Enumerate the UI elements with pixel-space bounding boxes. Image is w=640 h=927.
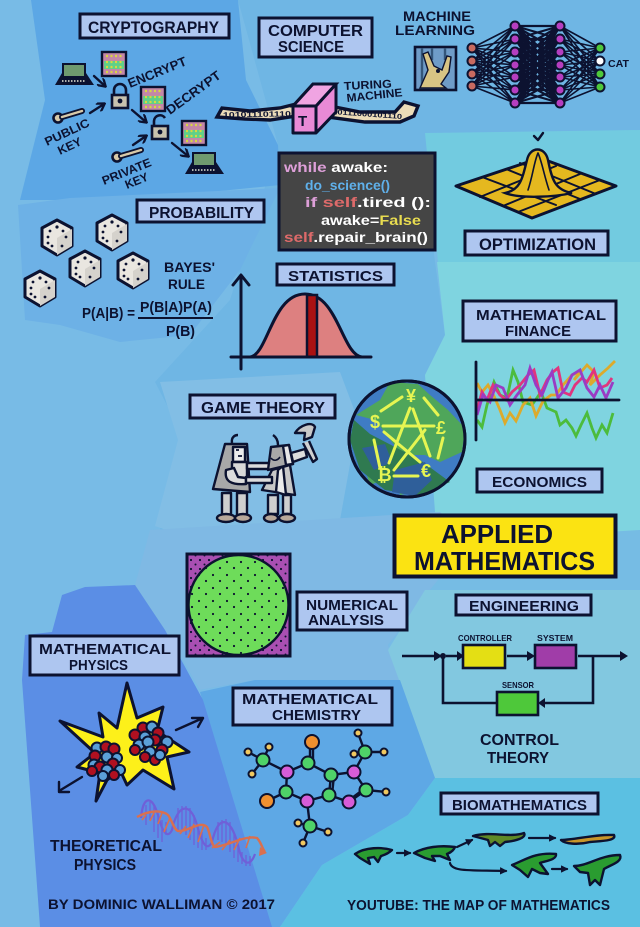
currency symbols: €	[421, 461, 431, 481]
heading: machine learning	[395, 9, 475, 38]
cryptography diagram	[42, 52, 224, 192]
input nodes	[468, 44, 476, 90]
arrow: up right	[176, 718, 203, 730]
dice	[25, 215, 148, 306]
system	[535, 633, 576, 668]
currency symbols	[370, 386, 446, 485]
heading: economics	[477, 469, 602, 492]
icon: die one	[42, 220, 72, 255]
labels: encrypt decrypt keys: PRIVATE	[100, 155, 153, 188]
heading: game theory	[190, 395, 335, 418]
green atoms	[256, 746, 372, 832]
controller	[458, 633, 512, 668]
tape left	[217, 104, 296, 120]
gold series	[477, 361, 615, 423]
controller: CONTROLLER	[458, 633, 512, 643]
heading: optimization	[465, 231, 608, 255]
heading: mathematical chemistry: MATHEMATICAL	[242, 692, 378, 708]
creature two	[414, 846, 455, 861]
hidden layer one	[510, 22, 520, 108]
heading: statistics: STATISTICS	[288, 268, 383, 285]
label: turing machine: TURING	[344, 78, 392, 93]
sensor	[497, 680, 538, 715]
neural network	[468, 22, 629, 108]
title: applied mathematics: APPLIED	[441, 519, 553, 549]
sensor: SENSOR	[502, 680, 534, 690]
tape right with curl: 10111000101110	[332, 109, 402, 121]
turing machine head: T	[298, 113, 307, 130]
code panel: self .repair_brain()	[284, 229, 428, 245]
bayes rule text: P(B|A)P(A)	[140, 299, 212, 316]
molecule	[244, 730, 390, 846]
bayes rule text	[82, 260, 215, 340]
currency symbols: ¥	[406, 386, 416, 406]
heading: economics: ECONOMICS	[492, 474, 587, 491]
purple series	[477, 368, 613, 415]
icon: die five	[118, 253, 148, 288]
star burst	[60, 683, 189, 801]
arrows: flow of encryption	[90, 76, 188, 156]
monte carlo square	[187, 554, 290, 656]
currency symbols: £	[436, 418, 446, 438]
icon: encrypted message	[141, 87, 165, 111]
heading: machine learning: LEARNING	[395, 23, 475, 38]
hidden layer two	[556, 22, 564, 108]
turing machine head	[293, 84, 336, 133]
title: applied mathematics	[394, 516, 616, 576]
highlighted band	[307, 295, 317, 357]
heading: mathematical physics: PHYSICS	[69, 658, 128, 674]
label: theoretical physics	[50, 838, 162, 874]
axes	[476, 362, 619, 440]
heading: probability: PROBABILITY	[149, 205, 255, 222]
bayes rule text: P(B)	[166, 323, 195, 340]
heading: engineering	[456, 595, 591, 615]
icon: die four	[70, 251, 100, 286]
heading: computer science: COMPUTER	[268, 23, 363, 40]
system: SYSTEM	[537, 633, 573, 643]
heading: computer science	[259, 18, 372, 57]
heading: biomathematics: BIOMATHEMATICS	[452, 797, 587, 814]
output nodes	[596, 44, 604, 92]
heading: biomathematics	[441, 793, 598, 814]
labels: encrypt decrypt keys	[42, 54, 224, 192]
heading: numerical analysis: ANALYSIS	[308, 613, 384, 629]
labels: encrypt decrypt keys: ENCRYPT	[126, 54, 189, 91]
heading: probability	[137, 200, 264, 222]
icon: decrypted message	[182, 121, 206, 145]
green series	[477, 370, 613, 438]
robot left	[213, 435, 270, 522]
creature six	[574, 855, 620, 885]
grid lines	[480, 163, 600, 212]
icon: die three	[25, 271, 55, 306]
currency symbols: ₿	[377, 465, 392, 485]
code panel: if self .tired ():	[305, 194, 431, 210]
icon: closed lock	[112, 84, 128, 108]
creature five	[512, 854, 556, 877]
arrow heads	[434, 651, 628, 708]
icon: receiver laptop	[185, 152, 224, 174]
bonds	[248, 733, 386, 843]
robot right	[246, 424, 317, 522]
title: applied mathematics: MATHEMATICS	[414, 546, 595, 576]
label: theoretical physics: PHYSICS	[74, 857, 136, 874]
label: control theory: THEORY	[487, 750, 549, 767]
bayes rule text: RULE	[168, 277, 205, 292]
tape right with curl	[328, 102, 418, 122]
heading: mathematical physics	[30, 636, 179, 675]
signal lines	[402, 656, 623, 703]
network connections	[472, 26, 600, 103]
label: turing machine: MACHINE	[346, 87, 403, 105]
labels: encrypt decrypt keys: KEY	[123, 170, 150, 192]
purple strand	[141, 800, 255, 863]
label: theoretical physics: THEORETICAL	[50, 838, 162, 855]
icon: check mark	[534, 133, 543, 140]
heading: mathematical finance: FINANCE	[505, 324, 571, 340]
arrow: down left	[59, 777, 82, 792]
atom cluster right	[130, 722, 172, 765]
heading: mathematical chemistry	[233, 688, 392, 725]
atom cluster left	[87, 742, 125, 781]
axes	[231, 275, 371, 369]
heading: mathematical finance	[463, 301, 616, 341]
magenta atoms	[280, 766, 360, 808]
tape left: 101011101110	[223, 109, 291, 119]
heading: mathematical physics: MATHEMATICAL	[39, 642, 171, 658]
creature three	[473, 833, 524, 846]
label: control theory: CONTROL	[480, 732, 559, 749]
heading: numerical analysis: NUMERICAL	[306, 598, 398, 614]
explosion	[59, 683, 203, 801]
magenta series	[477, 368, 612, 410]
peak	[505, 150, 572, 197]
orange atoms	[260, 735, 319, 808]
heading: machine learning: MACHINE	[403, 9, 471, 24]
bayes rule text: BAYES'	[164, 260, 215, 275]
labels: encrypt decrypt keys: DECRYPT	[163, 68, 224, 117]
optimization surface	[456, 133, 616, 218]
heading: computer science: SCIENCE	[278, 39, 344, 56]
labels: encrypt decrypt keys: KEY	[55, 134, 84, 158]
bayes rule text: P(A|B) =	[82, 305, 135, 322]
heading: mathematical finance: MATHEMATICAL	[476, 308, 606, 324]
globe	[349, 381, 465, 497]
robots	[213, 424, 317, 522]
evolution arrows	[397, 838, 567, 871]
heading: numerical analysis	[297, 592, 407, 630]
label: control theory	[480, 732, 559, 767]
labels: encrypt decrypt keys: PUBLIC	[42, 116, 92, 149]
code panel	[279, 153, 435, 250]
evolution creatures	[355, 833, 620, 885]
control theory diagram	[402, 633, 628, 715]
yellow landscape	[456, 158, 616, 218]
heading: engineering: ENGINEERING	[469, 599, 579, 615]
dna helix	[137, 800, 267, 866]
heading: optimization: OPTIMIZATION	[479, 236, 596, 254]
turing machine	[217, 78, 418, 133]
code panel: do_science()	[305, 177, 390, 193]
yellow atoms	[244, 730, 390, 846]
icon: open lock	[152, 115, 168, 139]
heading: game theory: GAME THEORY	[201, 400, 326, 417]
currency symbols: $	[370, 412, 380, 432]
currency links	[374, 397, 443, 476]
orange strand	[137, 811, 265, 852]
bell curve chart	[231, 275, 371, 369]
label: turing machine	[344, 78, 403, 105]
code panel: while awake:	[283, 159, 388, 175]
heading: mathematical chemistry: CHEMISTRY	[272, 708, 361, 724]
heading: cryptography: CRYPTOGRAPHY	[88, 18, 220, 37]
code panel: awake= False	[321, 212, 421, 228]
credit: author: BY DOMINIC WALLIMAN © 2017	[48, 896, 275, 912]
icon: public key	[54, 111, 82, 122]
curve	[250, 294, 362, 357]
label: cat: CAT	[608, 59, 629, 70]
icon: die two	[97, 215, 127, 250]
icon: sender laptop	[55, 63, 94, 85]
icon: plain message	[102, 52, 126, 76]
credit: youtube: YOUTUBE: THE MAP OF MATHEMATICS	[347, 898, 610, 914]
finance line chart	[476, 361, 619, 440]
creature four	[561, 835, 614, 844]
heading: statistics	[277, 264, 394, 285]
continents	[356, 382, 465, 495]
icon: private key	[112, 150, 141, 162]
icon: cat photo	[415, 47, 456, 90]
globe with currency network	[349, 381, 465, 497]
creature one	[355, 848, 392, 864]
purple rungs	[146, 802, 250, 866]
